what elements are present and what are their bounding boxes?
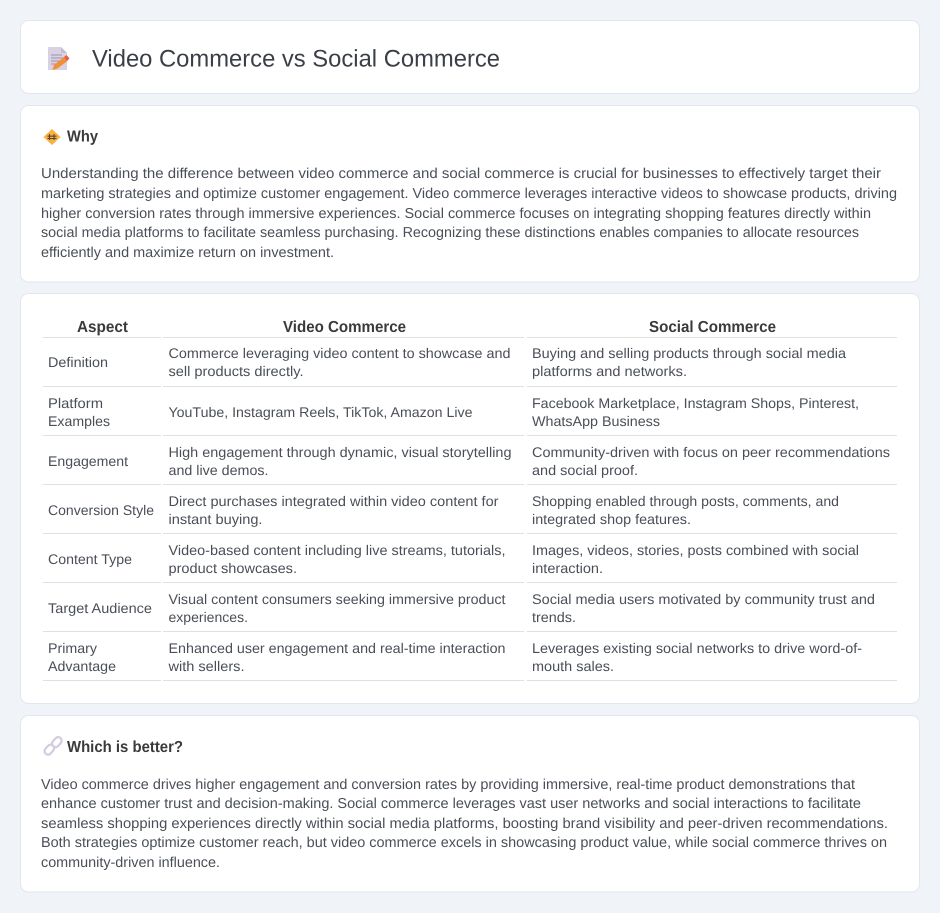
- row: target audience: [48, 591, 875, 625]
- text block: why paragraph: [41, 166, 897, 261]
- text block: why paragraph: Understanding the difference between video commerce and social commerce is crucial for businesses to effectively target their: [41, 166, 881, 182]
- row: target audience: Visual content consumers seeking immersive product: [168, 591, 506, 607]
- table header row: Video Commerce: [283, 319, 406, 336]
- text block: which is better paragraph: Video commerce drives higher engagement and conversion rates by providing immersive, real-time product demonstrations that: [41, 777, 855, 793]
- row: conversion style: Conversion Style: [48, 502, 154, 518]
- row: content type: Content Type: [48, 551, 132, 567]
- row: target audience: experiences.: [168, 609, 248, 625]
- row: platform examples: Examples: [48, 413, 110, 429]
- text block: which is better paragraph: [41, 777, 888, 871]
- row: primary advantage: Leverages existing social networks to drive word-of-: [532, 640, 862, 656]
- panel: which is better: [20, 716, 920, 892]
- text block: which is better paragraph: community-driven influence.: [41, 855, 220, 871]
- panel: header: [20, 20, 920, 94]
- text block: why paragraph: higher conversion rates through immersive experiences. Social commerce focuses on integrating shopping features directly within: [41, 206, 871, 222]
- text block: which is better paragraph: enhance customer trust and decision-making. Social commerce leverages vast user networks and social interactions to facilitate: [41, 796, 861, 812]
- table header row: Social Commerce: [649, 319, 776, 336]
- panel: why: [20, 106, 920, 282]
- row: conversion style: integrated shop features.: [532, 511, 691, 527]
- row: primary advantage: Primary: [48, 640, 97, 656]
- icon: chain link: [43, 736, 63, 756]
- row: primary advantage: mouth sales.: [532, 658, 614, 674]
- row: target audience: Target Audience: [48, 600, 152, 616]
- row: definition: platforms and networks.: [532, 363, 687, 379]
- row: definition: Definition: [48, 354, 108, 370]
- text block: why paragraph: efficiently and maximize return on investment.: [41, 245, 334, 261]
- row: engagement: and live demos.: [168, 462, 268, 478]
- row: engagement: and social proof.: [532, 462, 638, 478]
- row: platform examples: Platform: [48, 395, 103, 411]
- row: engagement: Engagement: [48, 453, 128, 469]
- row: engagement: [48, 444, 890, 478]
- row: conversion style: instant buying.: [168, 511, 262, 527]
- row: engagement: High engagement through dynamic, visual storytelling: [168, 444, 512, 460]
- heading: why: Why: [67, 128, 98, 146]
- row: primary advantage: Enhanced user engagement and real-time interaction: [168, 640, 506, 656]
- row: content type: Video-based content including live streams, tutorials,: [168, 542, 506, 558]
- text block: which is better paragraph: Both strategies optimize customer reach, but video commerce excels in showcasing product value, while social commerce thrives on: [41, 835, 887, 851]
- row: conversion style: [48, 493, 839, 527]
- row: primary advantage: Advantage: [48, 658, 116, 674]
- row: content type: Images, videos, stories, posts combined with social: [532, 542, 859, 558]
- title: Video Commerce vs Social Commerce: [92, 46, 500, 72]
- row: conversion style: Direct purchases integrated within video content for: [168, 493, 499, 509]
- text block: why paragraph: social media platforms to facilitate seamless purchasing. Recognizing these distinctions enables companies to allocate resources: [41, 225, 859, 241]
- row: platform examples: YouTube, Instagram Reels, TikTok, Amazon Live: [168, 404, 473, 420]
- row: primary advantage: [48, 640, 862, 674]
- row: content type: interaction.: [532, 560, 603, 576]
- panel: comparison table: [20, 294, 920, 704]
- row: target audience: Social media users motivated by community trust and: [532, 591, 875, 607]
- row: definition: Buying and selling products through social media: [532, 345, 846, 361]
- row: platform examples: [48, 395, 859, 429]
- row: definition: [48, 345, 846, 379]
- row: engagement: Community-driven with focus on peer recommendations: [532, 444, 890, 460]
- icon: document with pencil: [48, 47, 70, 70]
- row: definition: Commerce leveraging video content to showcase and: [168, 345, 510, 361]
- text block: why paragraph: marketing strategies and optimize customer engagement. Video commerce leverages interactive videos to showcase products, driving: [41, 186, 897, 202]
- icon: warning diamond: [44, 129, 60, 145]
- table header row: Aspect: [77, 319, 129, 336]
- row: platform examples: Facebook Marketplace, Instagram Shops, Pinterest,: [532, 395, 859, 411]
- row: conversion style: Shopping enabled through posts, comments, and: [532, 493, 839, 509]
- row: target audience: trends.: [532, 609, 576, 625]
- row: platform examples: WhatsApp Business: [532, 413, 660, 429]
- row: content type: product showcases.: [168, 560, 297, 576]
- text block: which is better paragraph: seamless shopping experiences directly within social media platforms, boosting brand visibility and peer-driven recommendations.: [41, 816, 888, 832]
- row: definition: sell products directly.: [168, 363, 304, 379]
- heading: which is better: Which is better?: [67, 739, 183, 756]
- table header row: [77, 319, 776, 336]
- row: content type: [48, 542, 859, 576]
- row: primary advantage: with sellers.: [167, 658, 244, 674]
